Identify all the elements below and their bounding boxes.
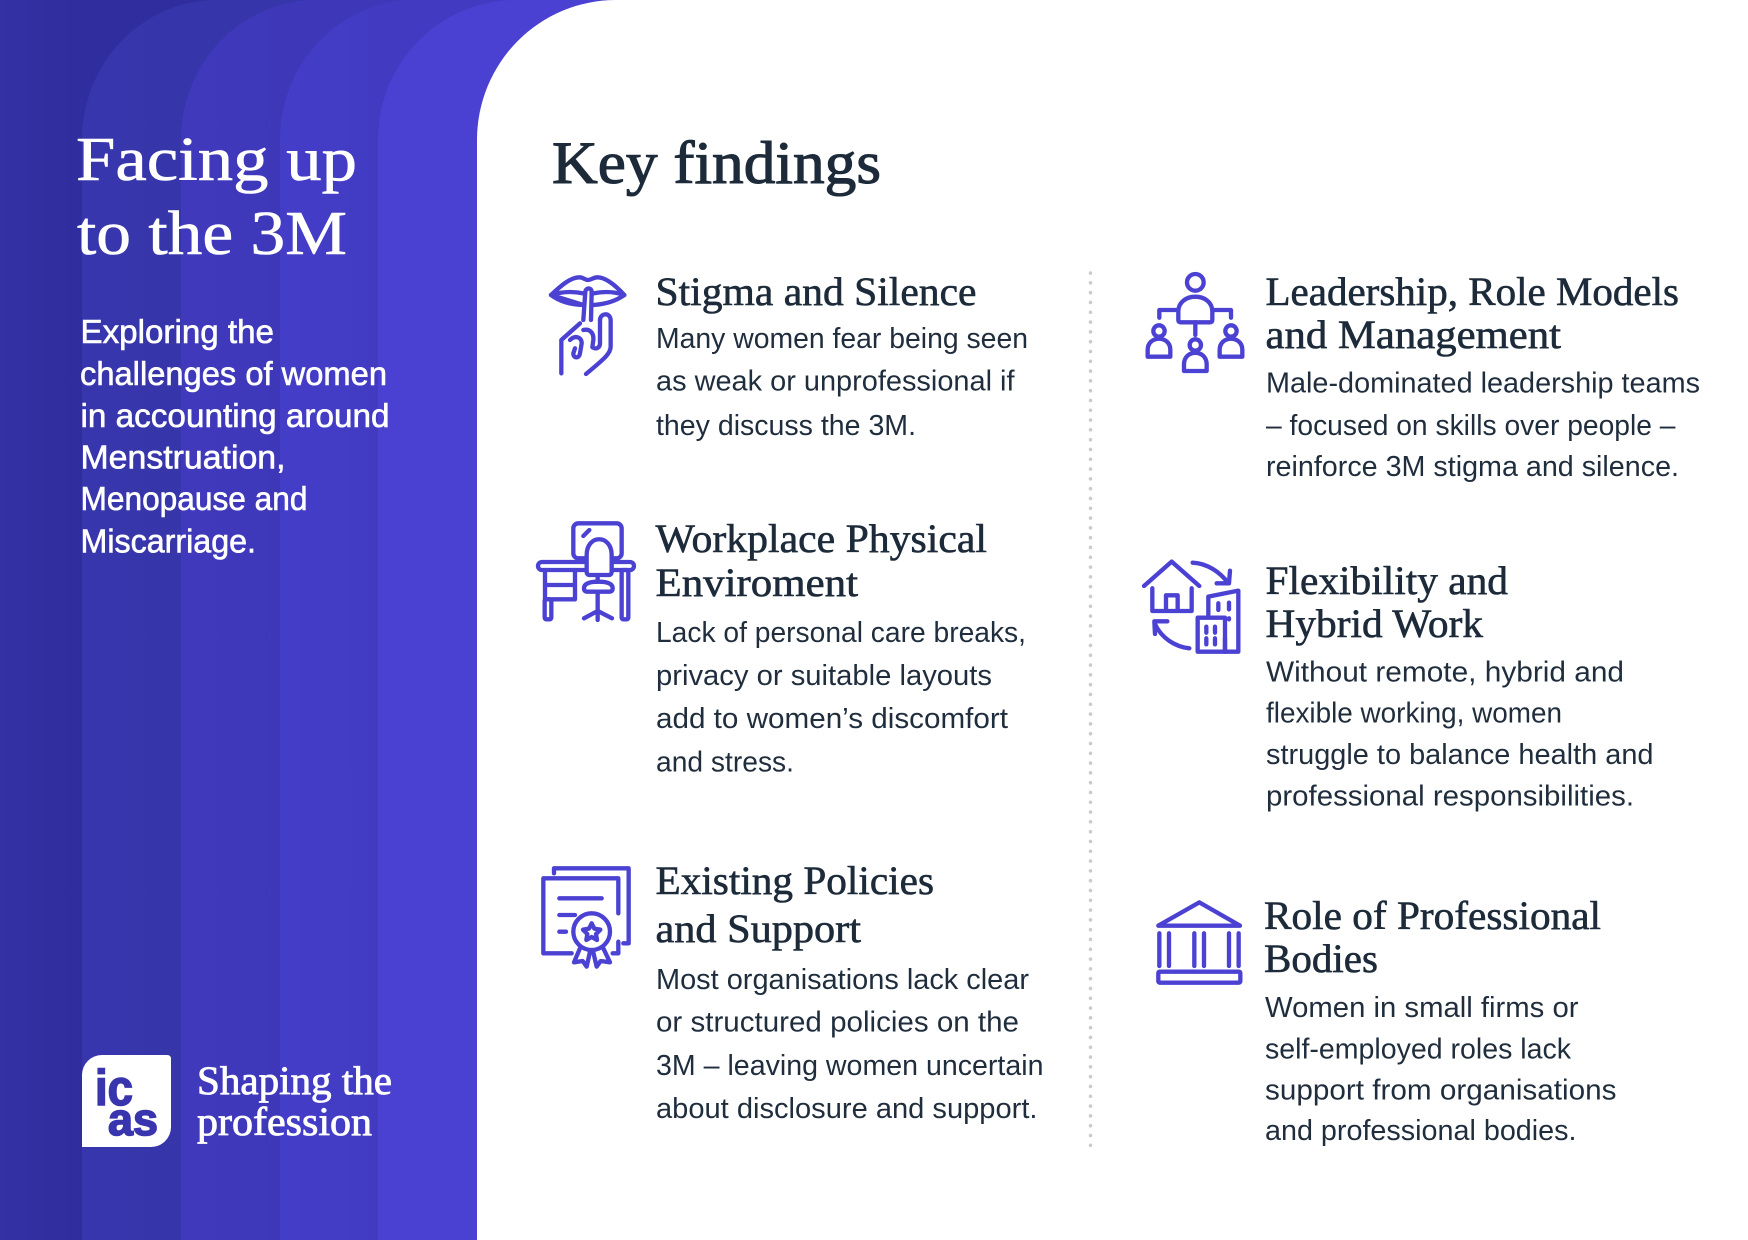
finding: role of professional bodies [1264, 893, 1616, 1147]
icon: desk and chair, workplace [538, 523, 634, 620]
finding: role of professional bodies: Role of Professional [1264, 893, 1601, 938]
finding: existing policies and support: Existing Policies [656, 858, 934, 903]
finding: stigma and silence: they discuss the 3M. [656, 410, 916, 442]
finding: stigma and silence [656, 269, 1028, 442]
logo: ICAS: as [108, 1094, 158, 1145]
finding: workplace physical environment: add to women’s discomfort [656, 703, 1008, 735]
title: to the 3M [77, 200, 347, 268]
finding: existing policies and support: or structured policies on the [656, 1006, 1019, 1038]
subtitle text block: Miscarriage. [80, 522, 256, 560]
title [76, 126, 357, 268]
finding: leadership, role models and management: – focused on skills over people – [1266, 410, 1676, 442]
finding: leadership, role models and management: Male-dominated leadership teams [1266, 368, 1700, 400]
finding: leadership, role models and management: reinforce 3M stigma and silence. [1266, 451, 1679, 483]
finding: workplace physical environment: Enviroment [656, 560, 858, 605]
title: Facing up [76, 126, 357, 194]
finding: existing policies and support: 3M – leaving women uncertain [656, 1050, 1044, 1082]
icon: certificate, existing policies [543, 868, 629, 967]
finding: flexibility and hybrid work [1266, 558, 1654, 812]
icon: house, building and arrows, flexibility [1144, 562, 1238, 652]
logo: ICAS [82, 1055, 171, 1147]
finding: stigma and silence: Many women fear being seen [656, 323, 1028, 355]
logo tagline [197, 1058, 392, 1144]
subtitle text block: Exploring the [80, 313, 274, 350]
subtitle text block [80, 313, 390, 560]
finding: role of professional bodies: and professional bodies. [1265, 1115, 1576, 1147]
finding: flexibility and hybrid work: Hybrid Work [1266, 601, 1483, 646]
finding: workplace physical environment: Lack of personal care breaks, [656, 617, 1026, 649]
subtitle text block: Menopause and [80, 480, 308, 517]
finding: existing policies and support [656, 858, 1044, 1125]
finding: workplace physical environment [656, 516, 1026, 778]
logo tagline: Shaping the [197, 1058, 392, 1103]
finding: leadership, role models and management [1266, 269, 1700, 483]
finding: role of professional bodies: Women in small firms or [1265, 992, 1579, 1024]
finding: existing policies and support: and Support [656, 906, 861, 951]
icon: people hierarchy, leadership [1148, 274, 1242, 371]
finding: leadership, role models and management: Leadership, Role Models [1266, 269, 1679, 314]
finding: flexibility and hybrid work: struggle to balance health and [1266, 739, 1654, 771]
subtitle text block: in accounting around [80, 397, 390, 434]
finding: existing policies and support: Most organisations lack clear [656, 964, 1030, 996]
heading: key findings: Key findings [552, 130, 881, 196]
subtitle text block: Menstruation, [80, 438, 286, 476]
finding: flexibility and hybrid work: professional responsibilities. [1266, 780, 1634, 812]
finding: role of professional bodies: self-employed roles lack [1265, 1034, 1572, 1066]
finding: existing policies and support: about disclosure and support. [656, 1093, 1038, 1125]
finding: flexibility and hybrid work: flexible working, women [1266, 698, 1562, 730]
finding: flexibility and hybrid work: Flexibility and [1266, 558, 1508, 603]
finding: stigma and silence: as weak or unprofessional if [656, 366, 1015, 398]
finding: stigma and silence: Stigma and Silence [656, 269, 976, 314]
logo: ICAS: ic [95, 1060, 133, 1116]
finding: role of professional bodies: Bodies [1264, 936, 1378, 981]
finding: role of professional bodies: support from organisations [1265, 1074, 1616, 1106]
icon: institution building, professional bodies [1158, 902, 1240, 983]
icon: lips and finger, stigma and silence [551, 277, 624, 374]
finding: workplace physical environment: Workplace Physical [656, 516, 987, 561]
finding: workplace physical environment: and stress. [656, 746, 794, 778]
divider: dotted column line [1089, 273, 1092, 1146]
finding: flexibility and hybrid work: Without remote, hybrid and [1266, 656, 1624, 688]
logo tagline: profession [197, 1099, 372, 1144]
finding: leadership, role models and management: and Management [1266, 312, 1561, 357]
subtitle text block: challenges of women [80, 355, 387, 392]
finding: workplace physical environment: privacy or suitable layouts [656, 660, 992, 692]
